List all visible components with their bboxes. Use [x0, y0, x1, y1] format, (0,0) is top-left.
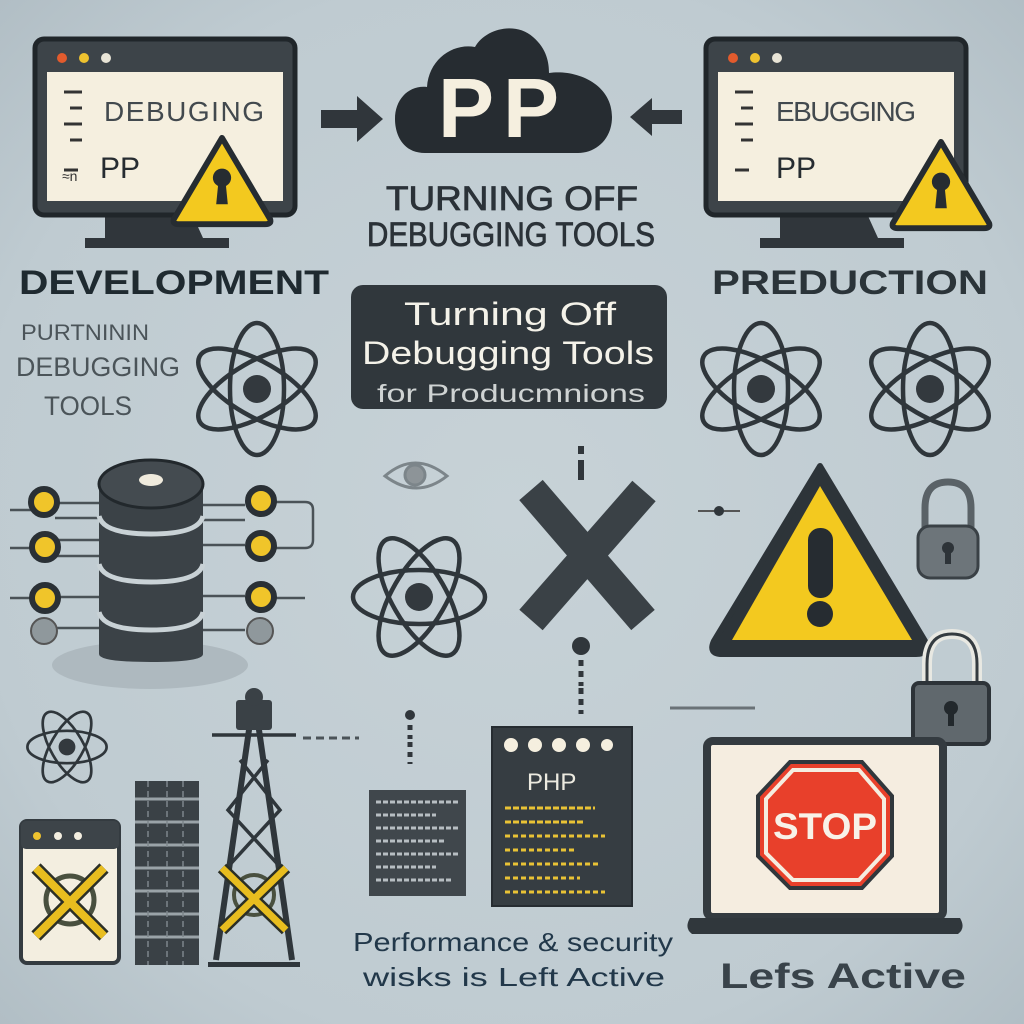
icon: big X	[531, 490, 644, 620]
label: development: DEVELOPMENT	[19, 264, 329, 302]
mark: dots below X	[578, 660, 584, 714]
text: performance and security risks: wisks is Left Active	[362, 962, 665, 992]
monitor: development: PP	[100, 152, 140, 185]
dashes: tower to code	[303, 736, 359, 740]
panel: title banner: Turning Off	[404, 296, 616, 332]
text: performance and security risks: Performance & security	[353, 927, 673, 957]
icon: cloud PHP	[395, 28, 612, 155]
icon: PHP code window: PHP	[527, 769, 576, 796]
icon: atom 3	[859, 323, 1001, 455]
monitor: development: DEBUGING	[104, 96, 264, 127]
monitor: production	[706, 39, 966, 248]
icon: tower with X	[208, 688, 300, 967]
text: performance and security risks	[353, 927, 673, 992]
icon: atom 1	[186, 323, 328, 455]
monitor: development: ≈n	[62, 168, 77, 184]
dashes right of X	[698, 510, 740, 512]
panel: title banner: for Producmnions	[377, 380, 645, 408]
dash right	[670, 706, 755, 710]
label: production: PREDUCTION	[712, 264, 988, 302]
text: debugging tools left: TOOLS	[44, 391, 132, 421]
icon: laptop with stop sign: STOP	[773, 806, 877, 847]
arrow: development to cloud	[321, 96, 383, 142]
heading: turning off debugging tools	[367, 180, 655, 254]
icon: cloud PHP: P	[503, 61, 559, 155]
icon: eye	[385, 463, 447, 488]
heading: turning off debugging tools: TURNING OFF	[386, 180, 638, 218]
monitor: production: PP	[776, 152, 816, 185]
icon: atom 5	[27, 705, 107, 789]
text: debugging tools left	[16, 320, 180, 421]
icon: padlock small	[918, 482, 978, 578]
icon: cloud PHP: P	[438, 61, 494, 155]
heading: turning off debugging tools: DEBUGGING TOOLS	[367, 216, 655, 254]
icon: small code panel	[369, 790, 466, 896]
icon: warning triangle right	[893, 142, 989, 228]
panel: title banner	[351, 285, 667, 409]
icon: warning triangle left	[174, 138, 270, 224]
label: lefts active: Lefs Active	[720, 957, 966, 996]
icon: atom 4	[353, 526, 485, 668]
icon: atom 2	[690, 323, 832, 455]
mark: dots above X	[578, 446, 584, 480]
arrow: production to cloud	[630, 98, 682, 136]
text: debugging tools left: PURTNININ	[21, 320, 149, 345]
icon: big warning triangle	[712, 466, 926, 654]
icon: PHP code window	[492, 727, 632, 906]
icon: laptop with stop sign	[687, 741, 963, 934]
monitor: production: EBUGGING	[776, 96, 916, 127]
icon: server rack	[135, 781, 199, 965]
icon: browser with X	[21, 821, 119, 963]
diagram: database with connectors	[10, 460, 313, 689]
text: debugging tools left: DEBUGGING	[16, 352, 180, 382]
monitor: development	[35, 39, 295, 248]
icon: padlock large	[913, 634, 989, 744]
panel: title banner: Debugging Tools	[362, 335, 654, 371]
